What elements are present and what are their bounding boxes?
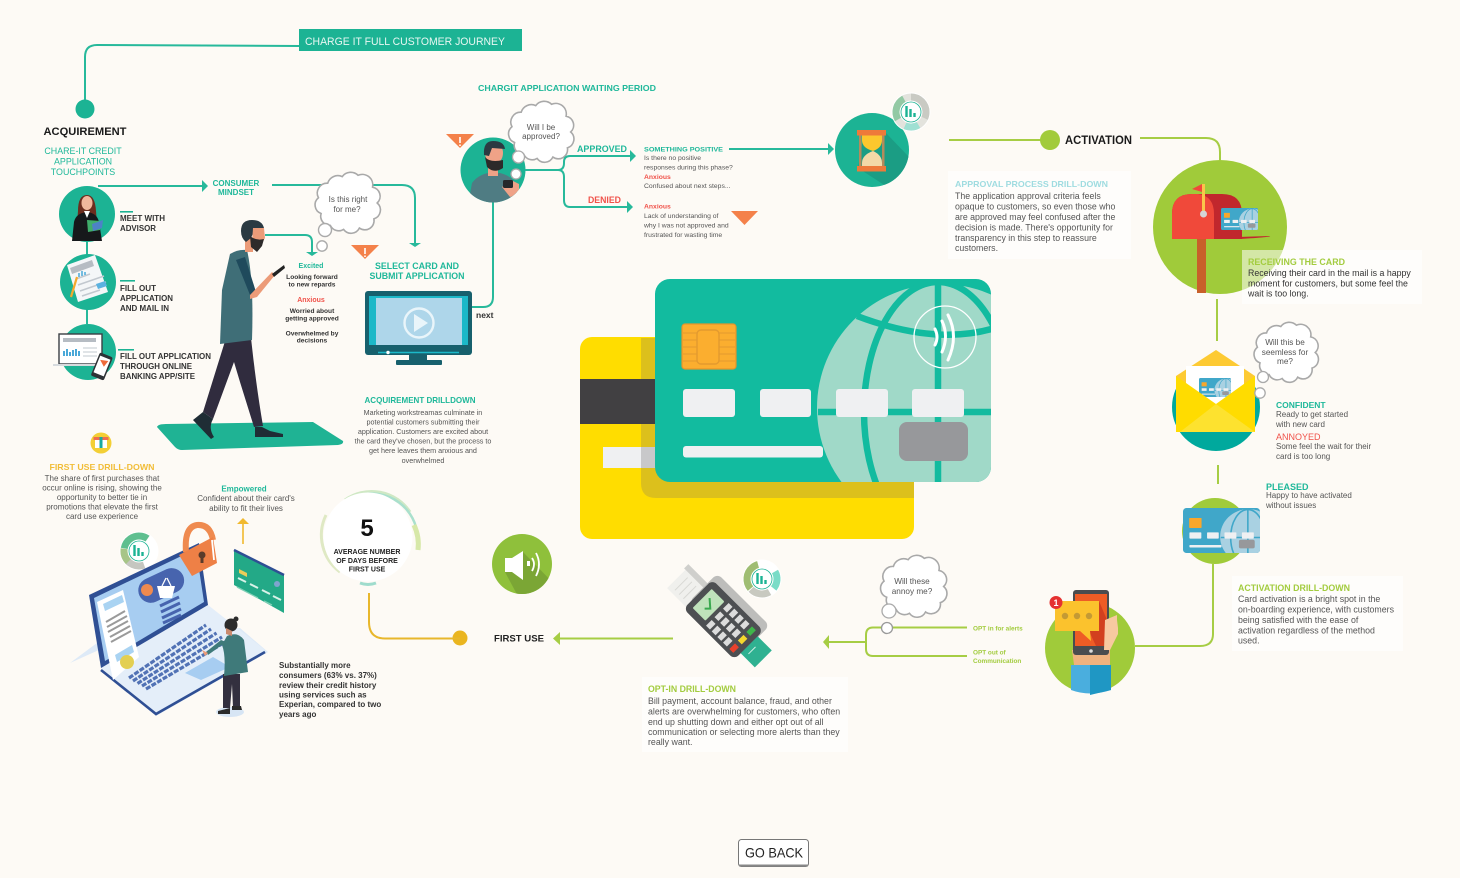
connector: title to acquirement — [85, 45, 299, 100]
text: credit history stat: review their credit history — [279, 681, 377, 690]
panel: activation drill-down — [1232, 576, 1403, 651]
text: denied notes: frustrated for wasting time — [644, 232, 722, 239]
text: pleased: without issues — [1265, 501, 1316, 510]
title banner: CHARGE IT FULL CUSTOMER JOURNEY — [305, 36, 506, 48]
text: opt options: OPT out of — [973, 650, 1007, 656]
text: credit history stat: Substantially more — [279, 661, 351, 670]
label: consumer mindset: MINDSET — [218, 188, 254, 197]
panel: activation drill-down: used. — [1238, 636, 1260, 646]
connector: activation line left — [949, 139, 1041, 141]
icon: padlock — [179, 525, 217, 576]
thought bubble: will I be approved — [509, 101, 574, 179]
thought bubble: is this right for me — [315, 172, 380, 251]
stat: average days before first use — [321, 491, 418, 584]
card logo block — [899, 422, 968, 461]
text: credit history stat: using services such as — [279, 690, 367, 700]
icon: hourglass — [835, 113, 910, 190]
text: online banking application — [118, 349, 211, 381]
text: mindset emotions: getting approved — [285, 316, 339, 322]
connector: envelope to activation card — [1217, 465, 1219, 484]
text: meet with advisor: MEET WITH — [120, 214, 165, 223]
icon: paper application circle — [60, 254, 116, 310]
text: denied notes — [643, 204, 729, 239]
text: acquirement drilldown: overwhelmed — [402, 456, 444, 465]
icon: donut chart approval — [891, 92, 931, 132]
text: mindset emotions: Worried about — [290, 308, 335, 315]
heading: select card — [370, 261, 464, 281]
icon: envelope with card — [1172, 350, 1260, 451]
button: go back — [738, 840, 808, 866]
panel: approval process drill-down — [948, 171, 1131, 259]
icon: phone with alert: 1 — [1053, 598, 1059, 608]
panel: activation drill-down: ACTIVATION DRILL-DOWN — [1238, 583, 1350, 593]
card number blocks — [683, 389, 964, 458]
connector: monitor to applicant — [472, 202, 493, 307]
icon: speaker circle — [492, 534, 552, 594]
heading: select card: SUBMIT APPLICATION — [370, 271, 464, 281]
panel: opt-in drill-down: alerts are overwhelming for customers, who often — [648, 706, 840, 716]
text: confident and annoyed: card is too long — [1276, 452, 1330, 461]
text: mindset emotions: to new repards — [289, 282, 336, 288]
text: online banking application: BANKING APP/SITE — [120, 372, 196, 381]
panel: approval process drill-down: opaque to customers, so even those who — [955, 202, 1116, 212]
text: credit history stat: consumers (63% vs. 37%) — [279, 671, 377, 680]
text: first use drill-down: The share of first purchases that — [45, 474, 160, 483]
panel: approval process drill-down: customers. — [955, 243, 998, 253]
text: acquirement drilldown — [355, 395, 491, 465]
text: mindset emotions: Anxious — [297, 297, 325, 304]
text: fill out application and mail in — [120, 280, 173, 313]
text: opt options: Communication — [973, 658, 1021, 665]
label: first use: FIRST USE — [494, 634, 544, 644]
arrow: to first use — [553, 632, 673, 645]
icon: advisor circle — [59, 186, 115, 242]
subheading: application touchpoints: CHARE-IT CREDIT — [44, 146, 122, 156]
title banner — [299, 29, 522, 51]
text: confident and annoyed — [1275, 400, 1371, 461]
text: denied notes: Anxious — [644, 204, 671, 210]
text: empowered — [197, 484, 295, 513]
thought bubble: is this right for me: Is this right — [329, 195, 368, 204]
stat: average days before first use: OF DAYS BEFORE — [336, 558, 398, 565]
panel: activation drill-down: being satisfied with the ease of — [1238, 615, 1359, 625]
text: acquirement drilldown: Marketing workstreamas culminate in — [364, 408, 482, 417]
thought bubble: will this be seemless: seemless for — [1262, 348, 1308, 357]
text: credit history stat — [279, 661, 381, 719]
text: online banking application: THROUGH ONLINE — [120, 362, 193, 371]
connector: mailbox to envelope — [1216, 299, 1218, 341]
panel: receiving the card — [1242, 250, 1422, 304]
panel: approval process drill-down: are approved may feel confused after the — [955, 212, 1116, 222]
text: pleased: PLEASED — [1266, 482, 1309, 492]
text: confident and annoyed: ANNOYED — [1276, 432, 1321, 442]
node: acquirement dot — [76, 100, 94, 118]
text: approved notes: responses during this phase? — [644, 164, 733, 172]
panel: opt-in drill-down: Bill payment, account balance, fraud, and other — [648, 696, 832, 706]
panel: receiving the card: moment for customers, but some feel the — [1248, 278, 1408, 288]
panel: opt-in drill-down: really want. — [648, 737, 692, 747]
walkway mat — [157, 422, 343, 450]
icon: mailbox circle — [1153, 160, 1287, 294]
text: fill out application and mail in: APPLICATION — [120, 294, 173, 303]
text: confident and annoyed: Ready to get started — [1276, 410, 1348, 419]
panel: receiving the card: wait is too long. — [1247, 288, 1309, 298]
panel: opt-in drill-down: end up shutting down and either opt out of all — [648, 717, 824, 727]
text: opt options — [973, 626, 1023, 665]
icon: phone with alert — [1045, 590, 1135, 695]
text: opt options: OPT in for alerts — [973, 626, 1023, 632]
heading: acquirement: ACQUIREMENT — [44, 126, 127, 138]
text: empowered: ability to fit their lives — [209, 504, 283, 513]
text: mindset emotions: decisions — [297, 338, 328, 344]
panel: activation drill-down: activation regardless of the method — [1238, 626, 1375, 636]
text: empowered: Empowered — [221, 484, 267, 494]
label: consumer mindset: CONSUMER — [213, 179, 260, 188]
text: denied notes: Lack of understanding of — [644, 213, 719, 220]
icon: activated card circle — [1182, 498, 1277, 565]
label: denied: DENIED — [588, 195, 621, 205]
text: mindset emotions — [285, 263, 339, 344]
warning triangle — [351, 245, 379, 259]
text: confident and annoyed: with new card — [1275, 420, 1325, 429]
text: first use drill-down: occur online is rising, showing the — [42, 484, 162, 492]
text: credit history stat: years ago — [279, 710, 316, 719]
arrow: to consumer mindset — [98, 180, 208, 192]
panel: receiving the card: RECEIVING THE CARD — [1248, 257, 1345, 267]
thought bubble: will I be approved: Will I be — [527, 123, 556, 132]
arrow: empowered up — [237, 518, 249, 544]
text: empowered: Confident about their card's — [197, 494, 295, 503]
thought bubble: is this right for me: for me? — [333, 205, 361, 214]
text: approved notes: SOMETHING POSITIVE — [644, 146, 723, 154]
text: first use drill-down: promotions that elevate the first — [46, 502, 159, 512]
node: first use dot — [452, 630, 468, 646]
text: confident and annoyed: Some feel the wait for their — [1276, 442, 1371, 451]
thought bubble: will these annoy me: Will these — [894, 577, 930, 586]
subheading: application touchpoints — [44, 146, 122, 177]
teal card front — [655, 279, 991, 482]
text: pleased: Happy to have activated — [1266, 491, 1352, 500]
connector: first use to stat — [369, 593, 460, 638]
panel: opt-in drill-down: OPT-IN DRILL-DOWN — [648, 684, 736, 694]
thought bubble: will this be seemless — [1254, 322, 1318, 398]
arrow: mindset to select card — [272, 185, 421, 247]
panel: opt-in drill-down — [642, 677, 848, 752]
panel: activation drill-down: Card activation is a bright spot in the — [1238, 594, 1380, 604]
connector: card to phone — [1135, 563, 1213, 646]
thought bubble: will this be seemless: me? — [1277, 357, 1293, 366]
icon: donut chart opt-in — [741, 558, 783, 600]
subheading: application touchpoints: TOUCHPOINTS — [51, 167, 115, 177]
text: first use drill-down: opportunity to better tie in — [57, 493, 147, 502]
text: approved notes: Is there no positive — [644, 155, 701, 162]
text: first use drill-down: FIRST USE DRILL-DOWN — [50, 462, 154, 472]
panel: opt-in drill-down: communication or selecting more alerts than they — [648, 727, 840, 737]
arrows: opt in and out branches — [823, 628, 967, 656]
panel: receiving the card: Receiving their card in the mail is a happy — [1248, 268, 1411, 278]
label: consumer mindset — [213, 179, 260, 197]
panel: approval process drill-down: transparency in this step to reassure — [955, 233, 1097, 243]
icon: gift badge — [90, 432, 112, 454]
stat: average days before first use: FIRST USE — [349, 566, 386, 574]
text: acquirement drilldown: get here leaves them anxious and — [369, 446, 477, 455]
illustration: laptop with shopper — [70, 543, 268, 717]
yellow card back — [580, 337, 914, 539]
connector: touchpoints vertical — [86, 241, 88, 324]
icon: online banking circle — [53, 324, 116, 381]
text: approved notes — [644, 146, 733, 190]
thought bubble: will this be seemless: Will this be — [1265, 338, 1305, 347]
warning triangle — [446, 134, 474, 148]
icon: applicant circle — [460, 138, 526, 205]
stat: average days before first use: 5 — [360, 515, 374, 542]
button: go back: GO BACK — [745, 844, 804, 860]
label: next: next — [476, 310, 494, 320]
text: mindset emotions: Excited — [299, 263, 323, 270]
text: meet with advisor: ADVISOR — [120, 224, 156, 233]
panel: approval process drill-down: The application approval criteria feels — [955, 191, 1101, 201]
text: fill out application and mail in: FILL OUT — [120, 284, 156, 293]
text: pleased — [1265, 482, 1352, 510]
panel: activation drill-down: on-boarding experience, with customers — [1238, 604, 1395, 614]
warning triangle — [731, 211, 758, 225]
text: confident and annoyed: CONFIDENT — [1276, 400, 1326, 410]
text: mindset emotions: Overwhelmed by — [286, 330, 339, 338]
chip — [682, 324, 736, 369]
connector: activation to mailbox — [1140, 138, 1220, 160]
text: approved notes: Confused about next steps... — [644, 183, 731, 190]
panel: approval process drill-down: APPROVAL PROCESS DRILL-DOWN — [955, 179, 1108, 189]
text: acquirement drilldown: potential customers submitting their — [366, 418, 480, 426]
heading: select card: SELECT CARD AND — [375, 261, 459, 271]
text: acquirement drilldown: ACQUIREMENT DRILLDOWN — [364, 395, 476, 405]
text: meet with advisor — [120, 211, 165, 233]
thought bubble: will these annoy me: annoy me? — [892, 587, 933, 596]
icon: isometric credit card — [234, 550, 284, 613]
label: approved: APPROVED — [577, 144, 627, 154]
text: denied notes: why I was not approved and — [643, 222, 729, 230]
text: fill out application and mail in: AND MAIL IN — [120, 304, 169, 313]
text: first use drill-down — [42, 462, 162, 521]
text: acquirement drilldown: application. Customers are excited about — [358, 427, 488, 436]
icon: video monitor — [365, 291, 472, 365]
text: acquirement drilldown: the card they've chosen, but the process to — [355, 436, 491, 446]
arrow: man to emotions — [265, 235, 318, 256]
thought bubble: will these annoy me — [881, 555, 947, 634]
text: credit history stat: Experian, compared to two — [279, 700, 381, 709]
node: activation dot — [1040, 130, 1060, 150]
figure: man walking with phone — [193, 220, 285, 439]
heading: waiting period: CHARGIT APPLICATION WAITING PERIOD — [478, 83, 656, 93]
panel: approval process drill-down: decision is made. There's opportunity for — [955, 222, 1113, 232]
arrow: approved to hourglass — [729, 143, 834, 155]
thought bubble: will I be approved: approved? — [522, 132, 560, 141]
stat: average days before first use: AVERAGE NUMBER — [334, 549, 400, 556]
text: first use drill-down: card use experience — [66, 512, 139, 521]
text: approved notes: Anxious — [644, 174, 671, 181]
text: online banking application: FILL OUT APPLICATION — [120, 352, 211, 361]
icon: donut chart first use — [118, 530, 160, 572]
arrows: approved and denied branches — [525, 150, 636, 213]
central illustration: credit cards — [580, 279, 991, 539]
icon: payment terminal — [664, 554, 783, 674]
heading: activation: ACTIVATION — [1065, 133, 1132, 147]
subheading: application touchpoints: APPLICATION — [54, 156, 112, 166]
text: mindset emotions: Looking forward — [286, 274, 338, 281]
